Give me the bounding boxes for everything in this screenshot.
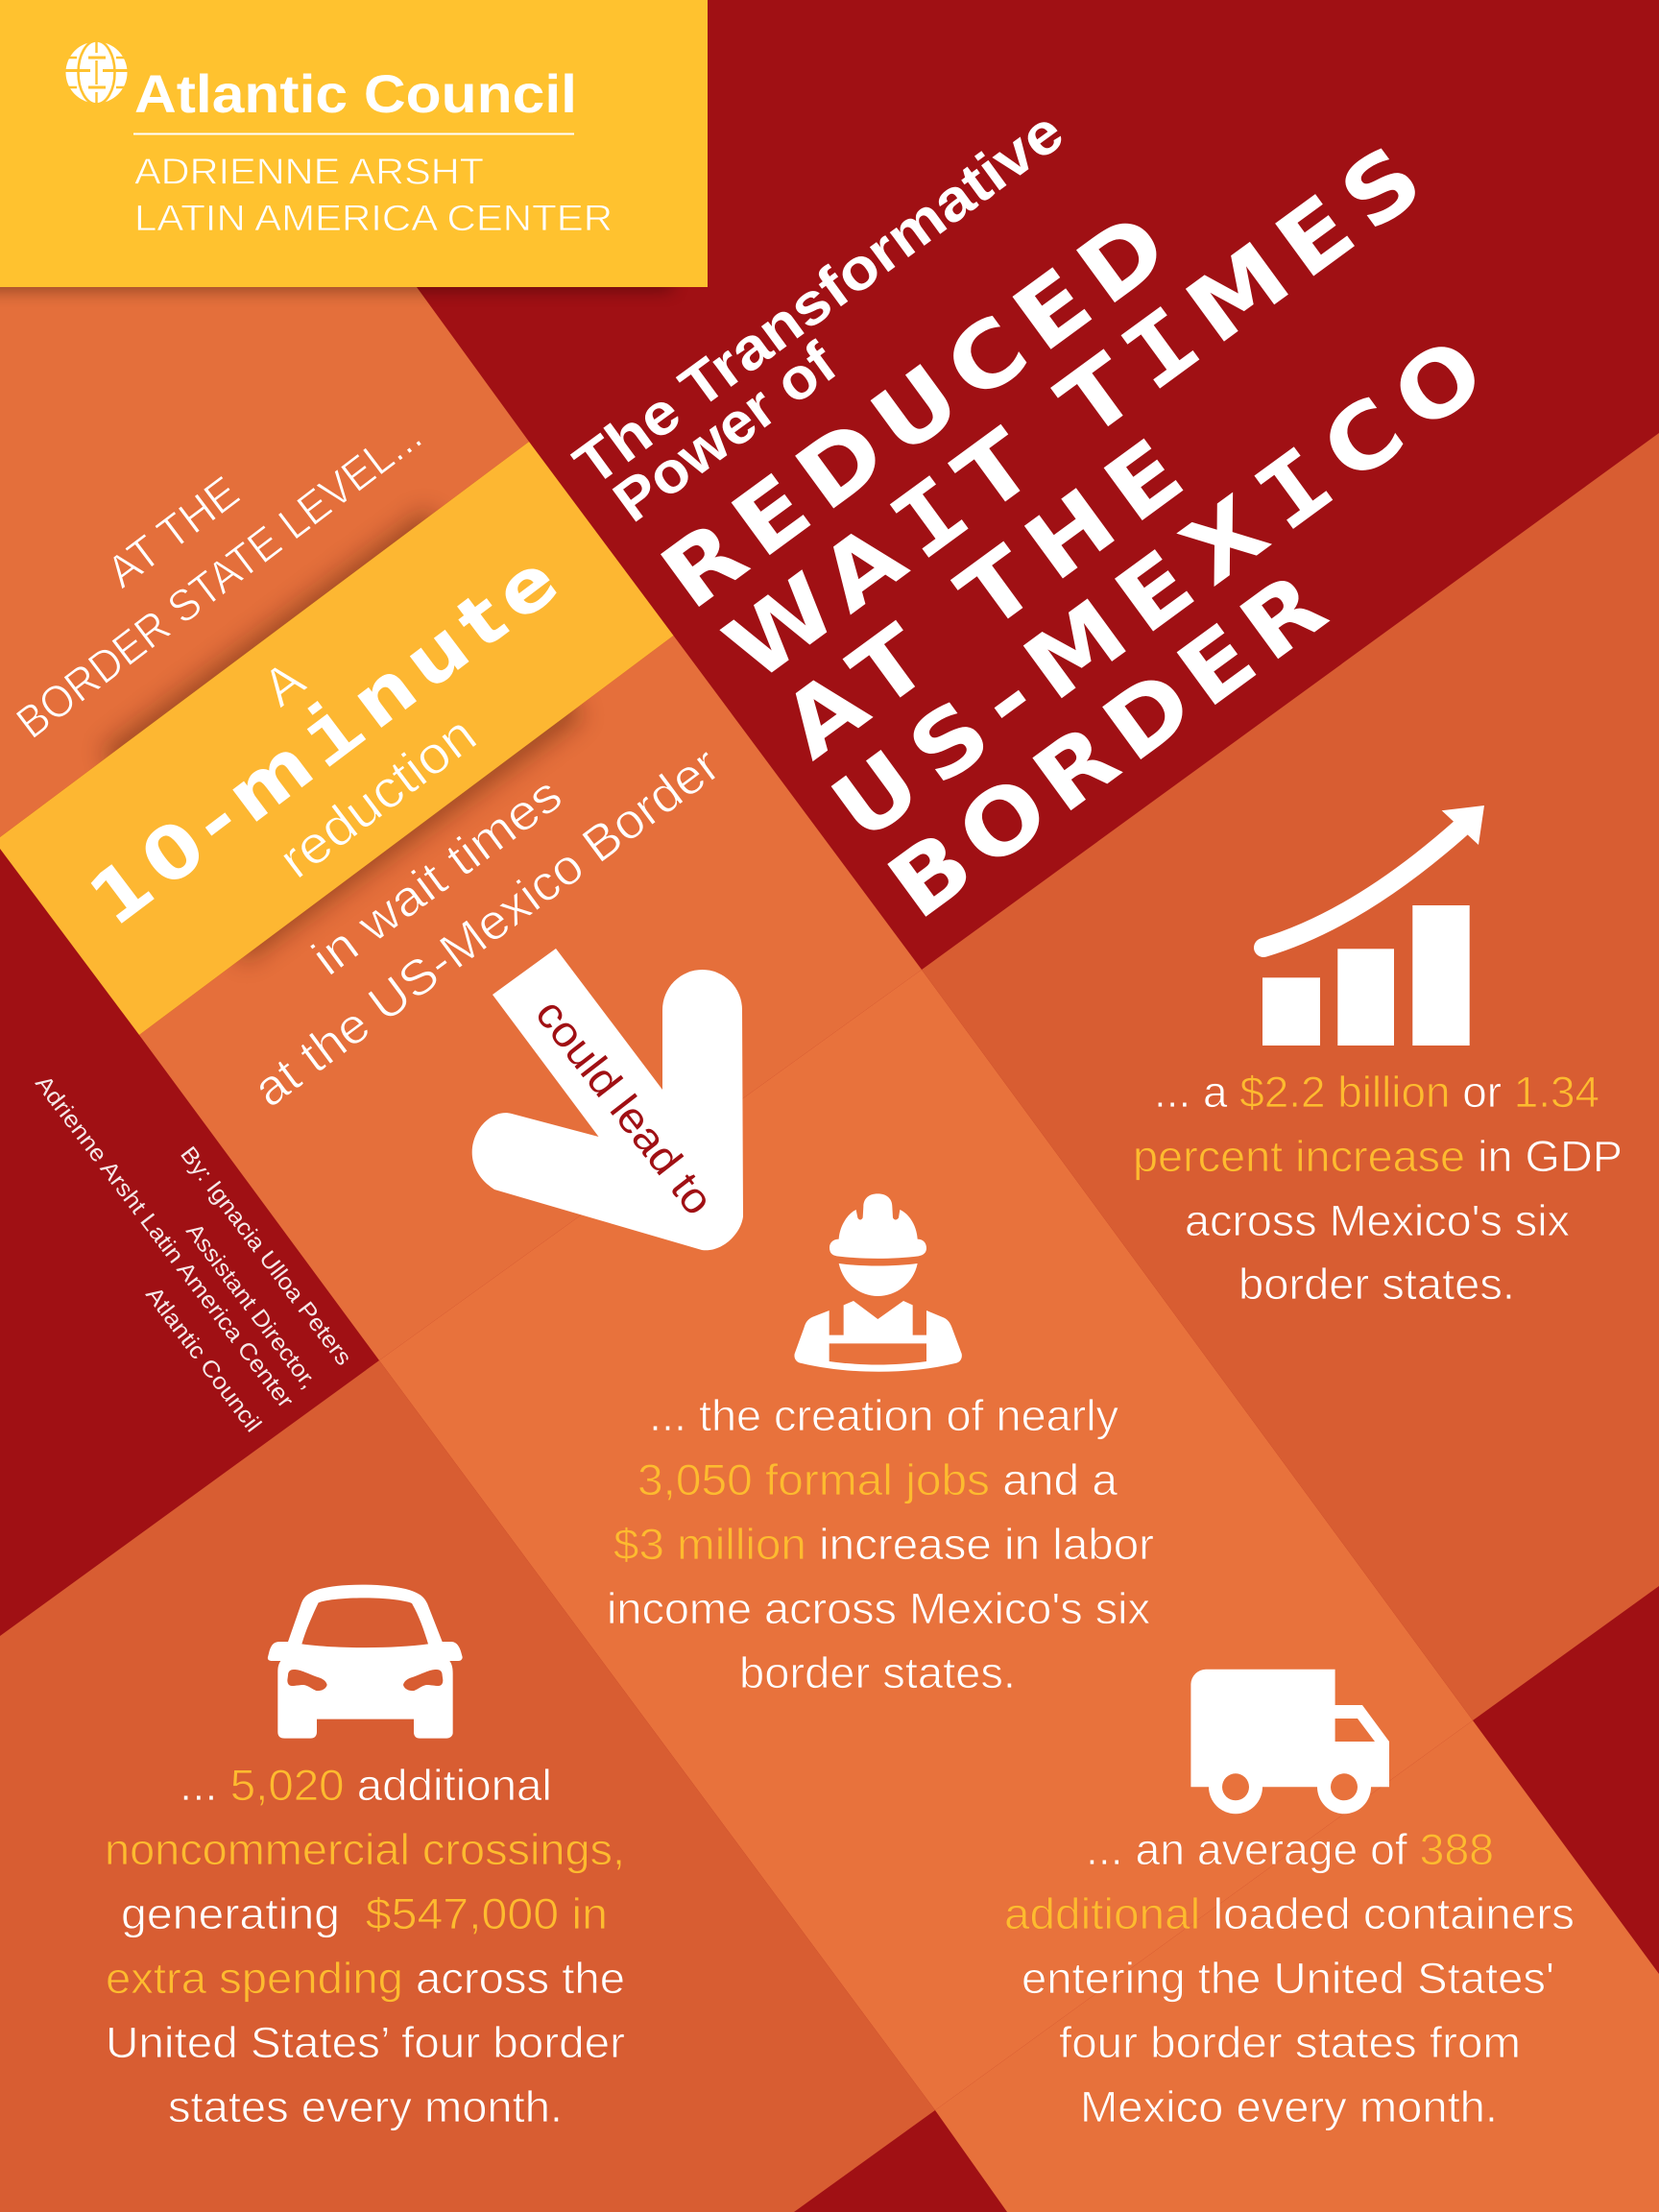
- panel: right darker orange: [922, 433, 1659, 1720]
- text: a 10-minute reduction: A: [252, 649, 316, 718]
- text: containers: [1004, 1825, 1575, 2131]
- text: jobs: $3 million increase in labor: [613, 1520, 1154, 1569]
- byline: [30, 1070, 356, 1437]
- text: crossings: [105, 1761, 625, 2131]
- text: at the border state level: BORDER STATE LEVEL...: [7, 409, 430, 748]
- text: GDP: border states.: [1238, 1260, 1515, 1309]
- text: in wait times at the US-Mexico Border: at the US-Mexico Border: [244, 736, 730, 1118]
- logo wordmark: Atlantic Council: [134, 63, 577, 124]
- text: containers: entering the United States': [1022, 1954, 1554, 2003]
- title main: US-MEXICO: [813, 318, 1508, 869]
- icon: globe: [63, 40, 131, 105]
- text: GDP: ... a $2.2 billion or 1.34: [1154, 1068, 1599, 1117]
- text: GDP: percent increase in GDP: [1133, 1132, 1623, 1181]
- arrow: could lead to: [472, 949, 743, 1250]
- text: in wait times at the US-Mexico Border: in wait times: [302, 766, 572, 987]
- panel: logo box: [0, 0, 708, 287]
- byline: Atlantic Council: [140, 1282, 266, 1437]
- title main: REDUCED: [643, 193, 1186, 630]
- panel: middle diagonal lower: [935, 1720, 1659, 2212]
- text: crossings: generating $547,000 in: [121, 1889, 608, 1938]
- arrow: could lead to: could lead to: [526, 990, 723, 1224]
- shadow of yellow band: [102, 509, 584, 963]
- text: crossings: ... 5,020 additional: [180, 1761, 552, 1810]
- text: jobs: 3,050 formal jobs and a: [637, 1455, 1118, 1504]
- logo subtitle: LATIN AMERICA CENTER: [134, 199, 613, 239]
- title main: AT THE: [764, 420, 1202, 780]
- text: a 10-minute reduction: 10-minute: [73, 537, 578, 950]
- icon: truck: [1190, 1670, 1389, 1814]
- logo subtitle: ADRIENNE ARSHT: [134, 152, 484, 192]
- title intro: Power of: [602, 329, 849, 534]
- title main: WAIT TIMES: [707, 125, 1446, 709]
- icon: car: [268, 1585, 463, 1739]
- panel: bottom-left darker orange: [0, 1360, 935, 2212]
- text: containers: additional loaded containers: [1004, 1889, 1575, 1938]
- text: jobs: border states.: [739, 1648, 1016, 1697]
- panel: yellow band: [0, 442, 674, 1035]
- text: GDP: across Mexico's six: [1185, 1196, 1571, 1245]
- text: crossings: noncommercial crossings,: [105, 1825, 625, 1874]
- text: at the border state level: AT THE: [97, 466, 248, 597]
- icon: bar chart with rising arrow: [1262, 805, 1484, 1046]
- text: a 10-minute reduction: reduction: [268, 704, 487, 890]
- byline: By: Ignacia Ulloa Peters: [175, 1142, 356, 1370]
- text: jobs: ... the creation of nearly: [649, 1391, 1119, 1440]
- panel: top-left orange: [0, 287, 529, 837]
- text: crossings: United States’ four border: [106, 2018, 625, 2067]
- text: jobs: income across Mexico's six: [607, 1584, 1151, 1633]
- text: containers: Mexico every month.: [1080, 2082, 1498, 2131]
- logo rule: [133, 132, 574, 134]
- logo subtitle: [134, 152, 613, 239]
- panel: middle diagonal centre: [379, 970, 1473, 2110]
- panel: middle diagonal upper: [139, 636, 922, 1360]
- title: [563, 48, 1611, 940]
- text: GDP: [1133, 1068, 1623, 1309]
- text: crossings: extra spending across the: [106, 1954, 625, 2003]
- byline: Assistant Director,: [180, 1218, 322, 1394]
- title main: BORDER: [870, 553, 1345, 940]
- shadow of logo box: [0, 273, 672, 290]
- text: containers: ... an average of 388: [1086, 1825, 1494, 1874]
- title intro: The Transformative: [563, 98, 1075, 497]
- text: containers: four border states from: [1059, 2018, 1521, 2067]
- title main: [643, 48, 1611, 940]
- text: crossings: states every month.: [168, 2082, 563, 2131]
- icon: worker: [794, 1193, 962, 1372]
- byline: Adrienne Arsht Latin America Center: [30, 1070, 299, 1413]
- text: jobs: [607, 1391, 1154, 1697]
